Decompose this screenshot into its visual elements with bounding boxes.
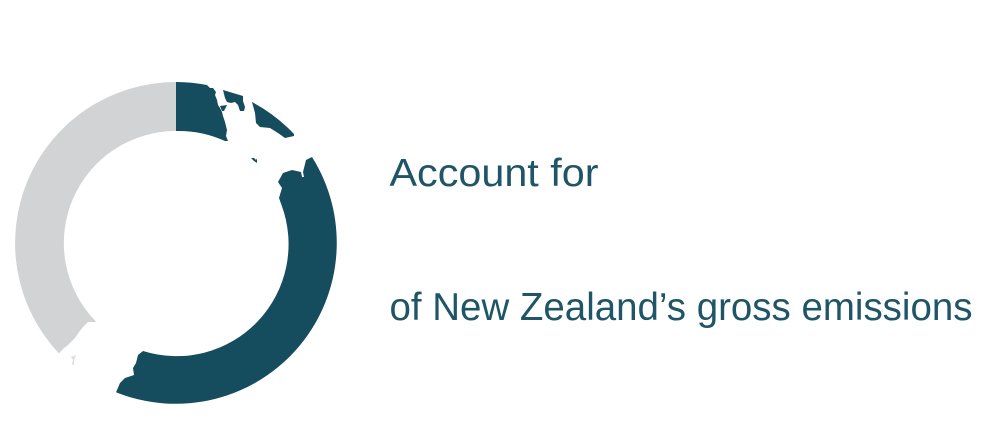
teal segment: Auckland fragment xyxy=(223,90,245,111)
teal fragment: small island xyxy=(251,158,257,163)
donut chart with New Zealand cut-out xyxy=(15,82,337,404)
text: of New Zealand's gross emissions: of New Zealand’s gross emissions xyxy=(390,286,972,329)
teal segment: Bay of Plenty fragment xyxy=(252,102,294,138)
teal main segment xyxy=(116,157,337,404)
small grey island fleck xyxy=(71,355,76,365)
teal segment: top of Northland xyxy=(176,82,228,141)
teal fragment: small islet off Northland xyxy=(220,105,227,111)
grey remainder of donut xyxy=(15,82,176,354)
text: Account for: Account for xyxy=(390,152,598,195)
